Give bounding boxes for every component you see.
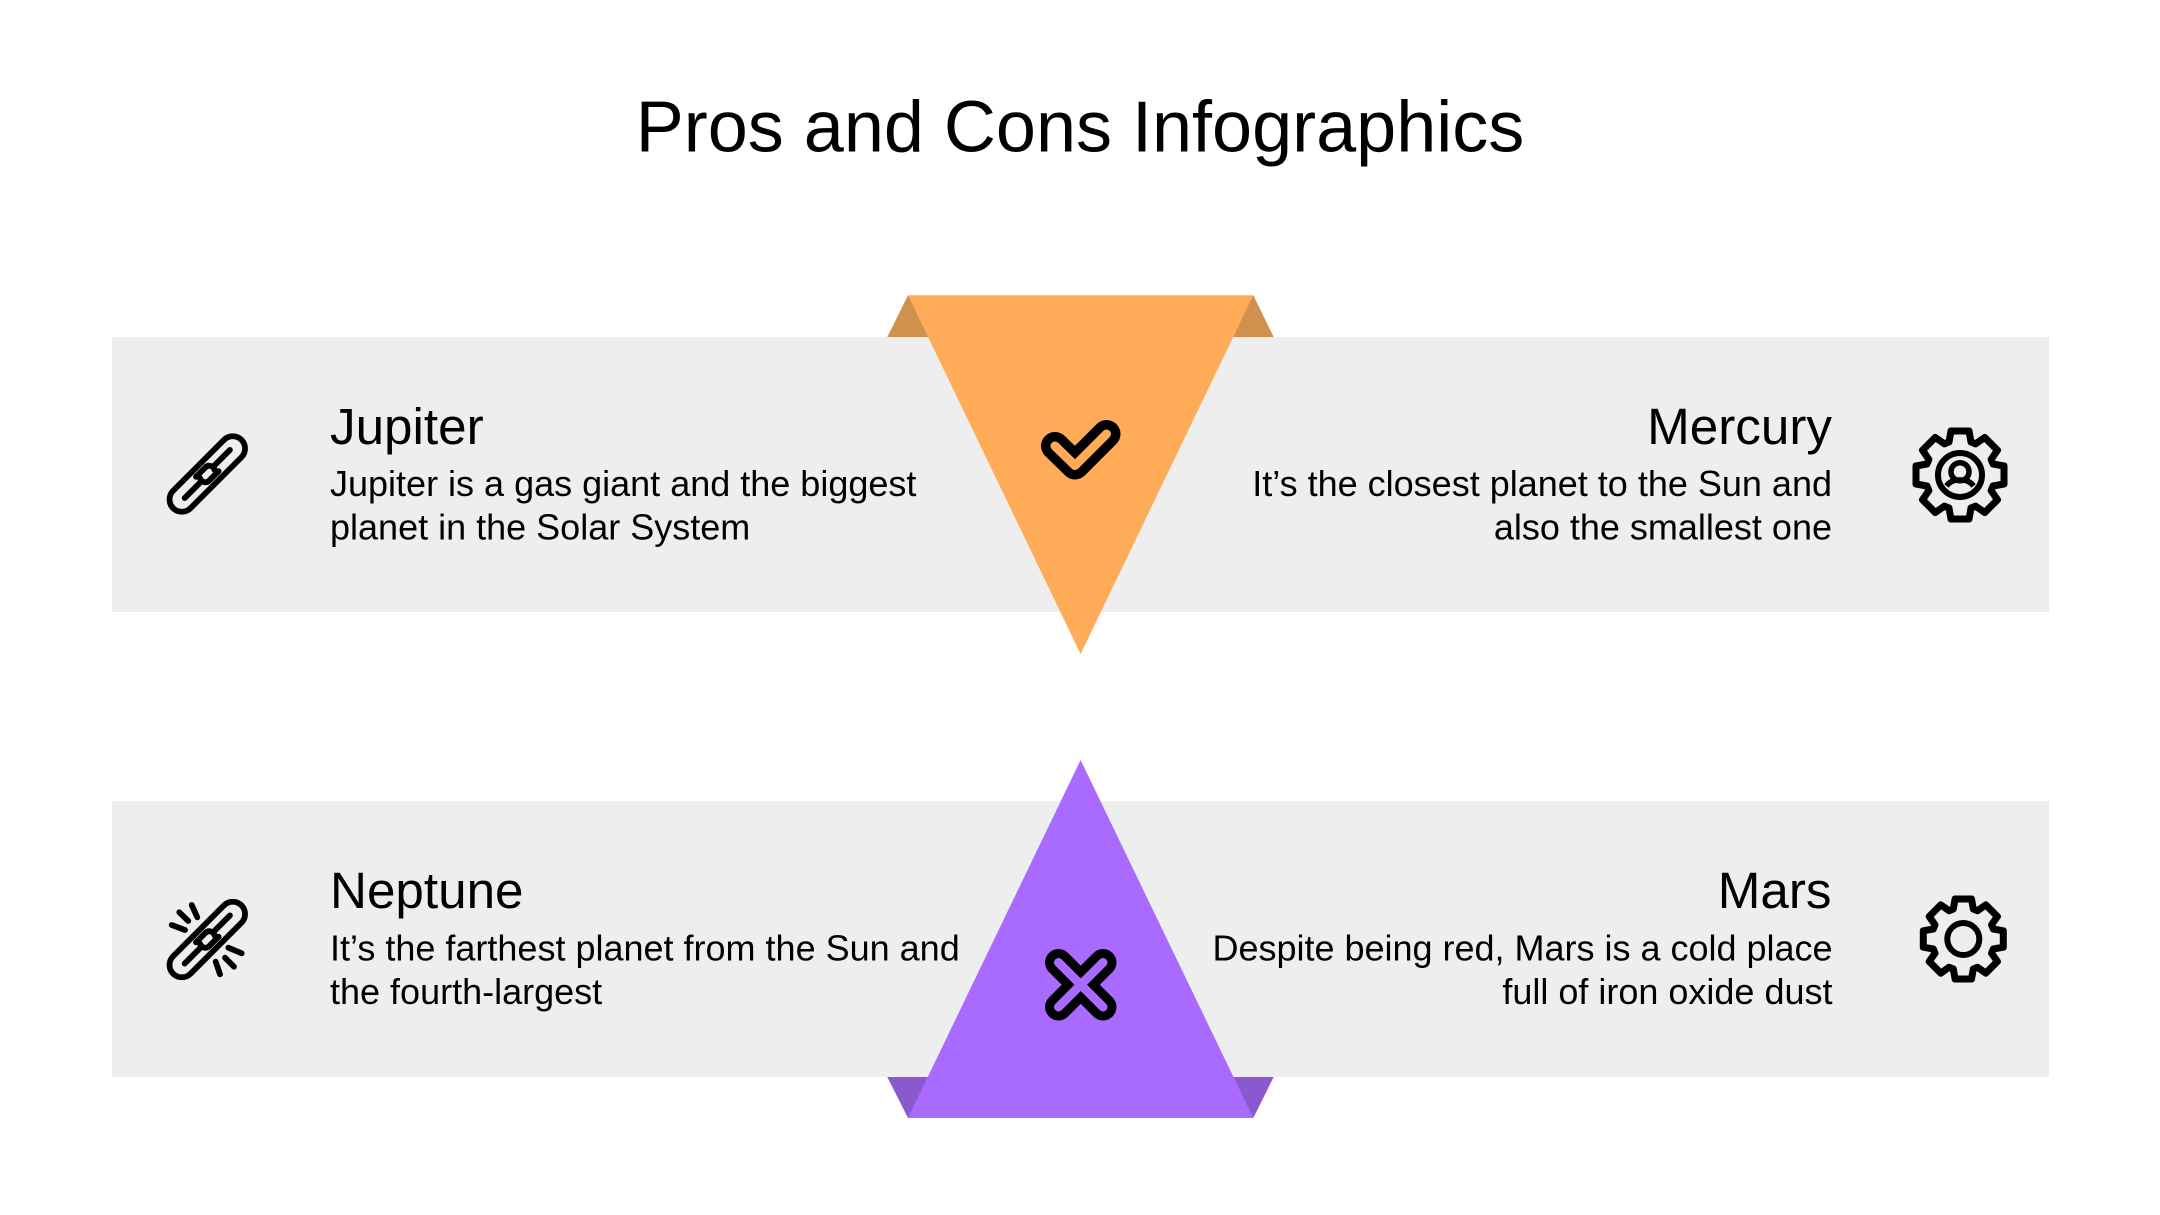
heading: Mars: Mars: [1718, 862, 1832, 919]
text: Mars description second line: full of iron oxide dust: [1502, 971, 1832, 1012]
block: Mars: [1212, 862, 1832, 1012]
icon: chain link: [164, 431, 250, 517]
text: Mars description: Despite being red, Mars is a cold place: [1212, 928, 1832, 968]
text: Neptune description: the fourth-largest: [330, 971, 602, 1012]
block: Mercury: [1252, 398, 1832, 548]
panel: cons band: [112, 801, 2049, 1077]
icon: cross mark: [1058, 962, 1103, 1007]
cons triangle: [887, 760, 1274, 1118]
heading: Jupiter: Jupiter: [330, 398, 484, 455]
icon: broken chain link: [164, 897, 250, 982]
icon: user gear: [1916, 431, 2004, 519]
panel: pros band: [112, 337, 2049, 612]
text: Mercury description: also the smallest one: [1494, 506, 1832, 548]
heading: Mercury: Mercury: [1647, 398, 1832, 455]
text: Mercury description: It’s the closest planet to the Sun and: [1252, 463, 1832, 504]
block: Jupiter: [330, 398, 916, 548]
text: Jupiter description: planet in the Solar System: [330, 506, 750, 548]
block: Neptune: [330, 862, 960, 1012]
heading: Neptune: Neptune: [330, 862, 524, 919]
pros triangle: [887, 295, 1274, 654]
title: Pros and Cons Infographics: [636, 88, 1524, 168]
text: Neptune description: It’s the farthest planet from the Sun and: [330, 928, 960, 968]
text: Jupiter description: Jupiter is a gas giant and the biggest: [330, 463, 916, 504]
icon: check mark: [1055, 434, 1106, 466]
icon: gear: [1923, 899, 2003, 979]
